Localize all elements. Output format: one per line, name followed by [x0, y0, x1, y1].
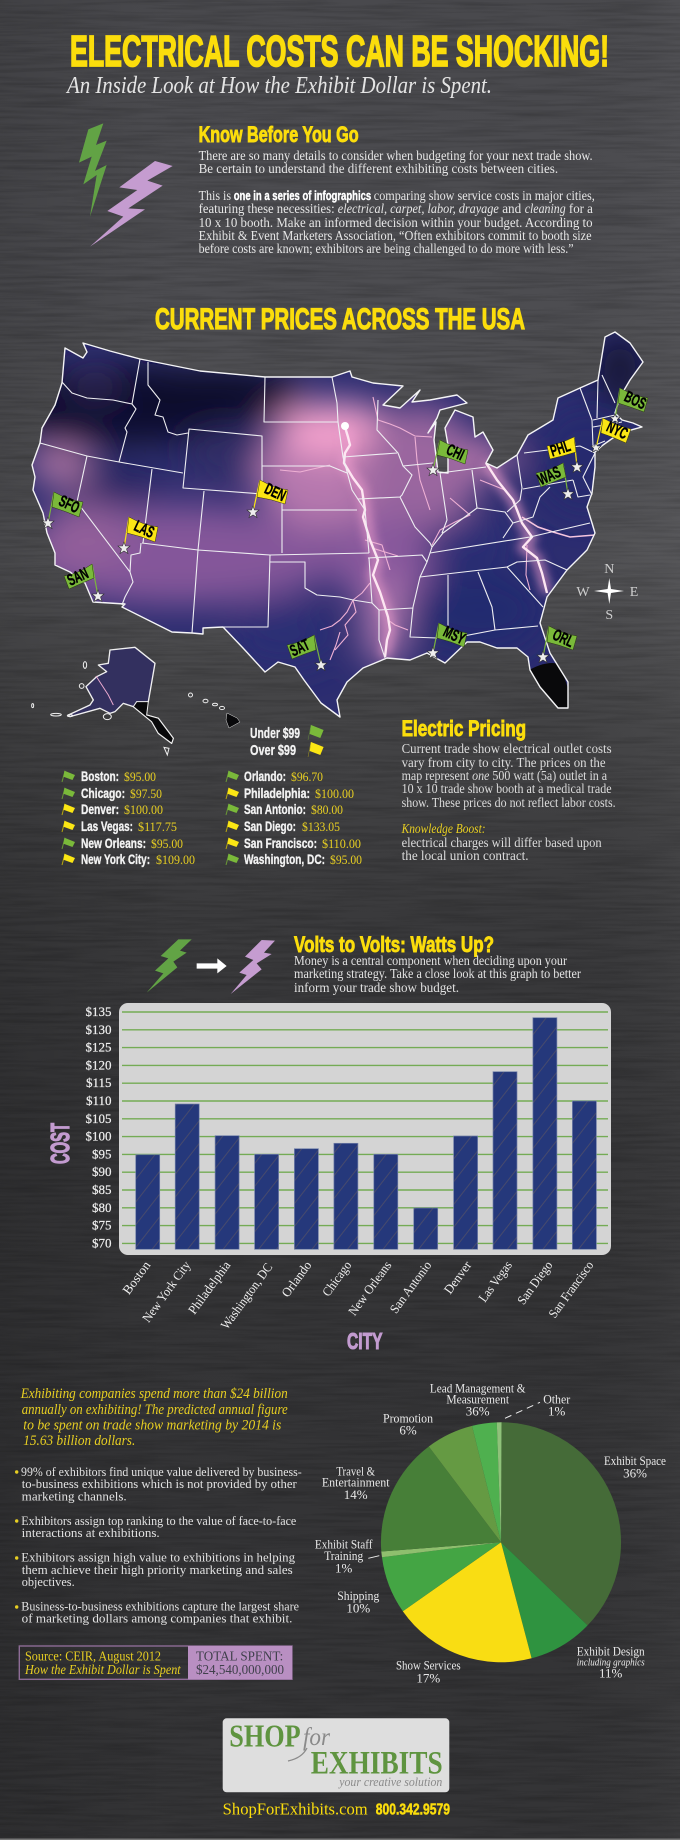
y axis labels: $135: [86, 1004, 112, 1019]
subtitle: An Inside Look at How the Exhibit Dollar is Spent.: [65, 73, 492, 99]
flag PHL: [547, 437, 583, 472]
y axis labels: $85: [92, 1182, 112, 1197]
axis title: cost: COST: [45, 1123, 75, 1164]
y axis labels: $90: [92, 1164, 112, 1179]
flag NYC: [591, 417, 631, 452]
x axis labels: Denver: [441, 1257, 475, 1297]
row San Diego: [226, 818, 340, 834]
pie labels: Exhibit Space: [604, 1453, 666, 1468]
x axis labels: Orlando: [278, 1258, 314, 1300]
y axis labels: $120: [86, 1057, 112, 1072]
source and total box: Source: CEIR, August 2012: [25, 1649, 161, 1664]
lightning glow: [344, 427, 547, 657]
panel: volts to volts: inform your trade show budget.: [294, 980, 459, 995]
map: hawaii: [188, 693, 240, 728]
legend: over 99: Over $99: [250, 742, 296, 759]
pie labels: 1%: [335, 1560, 353, 1575]
row Las Vegas: [62, 818, 177, 834]
row Orlando: Orlando:: [244, 768, 286, 784]
text block: intro: There are so many details to consider when budgeting for your next trade show.: [199, 148, 593, 163]
flags on the map: [42, 387, 649, 670]
pie labels: Exhibit Design: [577, 1644, 645, 1659]
text block: exhibiting spend callout: to be spent on trade show marketing by 2014 is: [23, 1418, 282, 1434]
bullet list: objectives.: [22, 1574, 75, 1589]
row Las Vegas: $117.75: [138, 819, 177, 834]
y axis labels: $125: [86, 1040, 112, 1055]
pie labels: Entertainment: [322, 1475, 390, 1490]
x axis labels: Washington, DC: [217, 1260, 275, 1332]
row San Francisco: $110.00: [322, 836, 361, 851]
florida black: [530, 663, 568, 708]
logo: EXHIBITS: [311, 1745, 443, 1781]
y axis labels: $70: [92, 1235, 112, 1250]
source and total box: $24,540,000,000: [196, 1662, 284, 1677]
row New York City: $109.00: [156, 852, 195, 867]
legend: [250, 725, 324, 759]
flag DEN: [247, 479, 289, 518]
panel: volts to volts: Money is a central component when deciding upon your: [294, 953, 567, 968]
flag DEN: DEN: [262, 479, 289, 505]
icon: compass: N: [604, 562, 614, 577]
bullet list: [15, 1464, 302, 1626]
pie labels: Promotion: [383, 1411, 433, 1426]
state lines: [40, 359, 622, 658]
text block: intro: Be certain to understand the different exhibiting costs between cities.: [199, 161, 558, 176]
bullet list: interactions at exhibitions.: [22, 1525, 160, 1540]
bullet list: them achieve their high priority marketing and sales: [22, 1562, 293, 1577]
text block: intro: for a: [569, 201, 593, 216]
row Philadelphia: Philadelphia:: [244, 785, 310, 801]
bullet list: 99% of exhibitors find unique value delivered by business-: [21, 1464, 302, 1479]
flag MSY: [427, 622, 468, 658]
flag SAN: SAN: [64, 564, 91, 589]
x axis labels: [119, 1257, 596, 1332]
x axis labels: New York City: [139, 1258, 194, 1325]
source and total box: TOTAL SPENT:: [196, 1649, 283, 1664]
flag SFO: [42, 492, 83, 528]
row Denver: $100.00: [124, 802, 163, 817]
x axis labels: New Orleans: [345, 1258, 394, 1318]
pie labels: including graphics: [577, 1658, 645, 1669]
x axis labels: San Francisco: [545, 1258, 596, 1321]
row Washington DC: Washington, DC:: [244, 851, 325, 867]
y axis labels: $80: [92, 1200, 112, 1215]
x axis labels: San Antonio: [386, 1258, 434, 1316]
flag SFO: SFO: [56, 492, 83, 517]
footer contact: ShopForExhibits.com: [223, 1800, 368, 1819]
x axis labels: San Diego: [514, 1258, 555, 1307]
main lightning: [344, 427, 547, 657]
source and total box: How the Exhibit Dollar is Spent: [24, 1662, 182, 1677]
row Boston: [62, 768, 156, 784]
flag NYC: NYC: [604, 417, 631, 443]
axis title: city: CITY: [347, 1328, 382, 1354]
row Chicago: [62, 785, 162, 801]
flag WAS: WAS: [535, 463, 563, 489]
panel: electric pricing: electrical charges will differ based upon: [402, 835, 602, 850]
pie labels: 14%: [344, 1487, 368, 1502]
row New Orleans: New Orleans:: [81, 835, 146, 851]
row San Diego: $133.05: [302, 819, 340, 834]
row Philadelphia: $100.00: [315, 786, 354, 801]
panel: volts to volts: [294, 932, 581, 995]
row Washington DC: $95.00: [330, 852, 362, 867]
text block: exhibiting spend callout: annually on exhibiting! The predicted annual figure: [22, 1402, 288, 1418]
row Orlando: $96.70: [291, 769, 323, 784]
icon: purple bolt: [231, 940, 275, 994]
panel: electric pricing: Knowledge Boost:: [401, 821, 486, 836]
panel: electric pricing: vary from city to city. The prices on the: [402, 755, 606, 770]
heading: electric pricing: Electric Pricing: [402, 716, 526, 741]
flag LAS: LAS: [131, 517, 157, 542]
row Denver: Denver:: [81, 801, 119, 817]
panel: electric pricing: 10 x 10 trade show booth at a medical trade: [402, 781, 612, 796]
row San Francisco: San Francisco:: [244, 835, 317, 851]
flag BOS: [610, 387, 649, 423]
flag SAT: [287, 635, 327, 670]
text block: exhibiting spend callout: 15.63 billion dollars.: [23, 1433, 135, 1449]
pie labels: Lead Management &: [430, 1380, 526, 1395]
icon: compass: S: [605, 608, 613, 623]
y axis labels: $95: [92, 1146, 112, 1161]
icon: compass: [576, 562, 638, 623]
logo: [223, 1718, 449, 1792]
text block: intro: cleaning: [525, 201, 566, 216]
us outline: [32, 332, 643, 717]
text block: intro: 10 x 10 booth. Make an informed decision within your budget. According to: [199, 215, 593, 230]
x axis labels: Philadelphia: [185, 1258, 234, 1317]
icon: compass: W: [576, 585, 590, 600]
row San Diego: San Diego:: [244, 818, 296, 834]
pie labels: Exhibit Staff: [315, 1536, 373, 1551]
y axis labels: $115: [86, 1075, 112, 1090]
pie labels: Measurement: [446, 1391, 509, 1406]
y axis labels: $130: [86, 1022, 112, 1037]
icon: green bolt: [147, 939, 192, 993]
row Chicago: $97.50: [130, 786, 162, 801]
text block: intro: featuring these necessities:: [199, 201, 335, 216]
pie labels: [315, 1380, 666, 1685]
flag BOS: BOS: [622, 387, 649, 413]
pie labels: Other: [543, 1391, 571, 1406]
row Boston: $95.00: [124, 769, 156, 784]
flag PHL: PHL: [548, 437, 573, 460]
y axis labels: $110: [86, 1093, 112, 1108]
flag WAS: [535, 463, 574, 500]
pie labels: 11%: [599, 1666, 623, 1681]
bullet list: Business-to-business exhibitions capture the largest share: [21, 1599, 299, 1614]
heading: volts to volts: Volts to Volts: Watts Up?: [294, 932, 494, 957]
flag ORL: ORL: [550, 625, 577, 651]
x axis labels: Las Vegas: [475, 1258, 515, 1305]
text block: intro: electrical, carpet, labor, drayage: [338, 201, 499, 216]
y axis labels: [86, 1004, 112, 1250]
y axis labels: $100: [86, 1129, 112, 1144]
text block: intro: [199, 148, 595, 256]
pie labels: 36%: [623, 1465, 647, 1480]
row San Antonio: $80.00: [311, 802, 343, 817]
footer contact: [223, 1800, 450, 1819]
pie labels: 17%: [416, 1670, 440, 1685]
pie labels: Travel &: [336, 1464, 375, 1479]
map: alaska: [32, 647, 173, 755]
price list: [62, 768, 362, 867]
row Orlando: [226, 768, 323, 784]
flag MSY: MSY: [441, 622, 468, 648]
pie chart: [315, 1380, 666, 1685]
icon: arrow: [197, 958, 227, 973]
row Chicago: Chicago:: [81, 785, 125, 801]
panel: electric pricing: map represent one 500 watt (5a) outlet in a: [402, 768, 607, 783]
lightning branches: [280, 397, 530, 660]
icon: lightning bolts top: [79, 123, 173, 247]
y axis labels: $105: [86, 1111, 112, 1126]
bullet list: to-business exhibitions which is not provided by other: [22, 1476, 297, 1491]
text block: intro: comparing show service costs in major cities,: [374, 188, 595, 203]
bullet list: Exhibitors assign high value to exhibitions in helping: [21, 1550, 295, 1565]
text block: intro: and: [502, 201, 521, 216]
footer contact: 800.342.9579: [376, 1802, 450, 1819]
flag LAS: [118, 517, 158, 554]
text block: intro: Exhibit & Event Marketers Association, “Often exhibitors commit to booth size: [199, 228, 592, 243]
text block: intro: one in a series of infographics: [234, 188, 371, 203]
row Denver: [62, 801, 163, 817]
panel: electric pricing: [401, 716, 616, 863]
row New Orleans: $95.00: [151, 836, 183, 851]
flag ORL: [537, 625, 577, 662]
bar chart: [45, 1003, 611, 1354]
flag SAT: SAT: [287, 635, 313, 660]
y axis labels: $75: [92, 1218, 112, 1233]
logo: SHOP: [229, 1718, 301, 1754]
bars: [136, 1018, 596, 1249]
map: contiguous USA with lightning: [31, 331, 644, 718]
panel: volts to volts: marketing strategy. Take a close look at this graph to better: [294, 966, 581, 981]
heading: know before you go: Know Before You Go: [199, 122, 359, 147]
row Boston: Boston:: [81, 768, 119, 784]
legend: under 99: Under $99: [250, 725, 300, 742]
panel: electric pricing: show. These prices do not reflect labor costs.: [402, 795, 616, 810]
x axis labels: Chicago: [319, 1258, 354, 1299]
icon: compass: E: [630, 585, 638, 600]
pie labels: 1%: [548, 1404, 566, 1419]
text block: exhibiting spend callout: [20, 1386, 288, 1449]
flag CHI: CHI: [444, 440, 467, 464]
bullet list: of marketing dollars among companies that exhibit.: [22, 1611, 292, 1626]
pie labels: Training: [324, 1548, 364, 1563]
flag CHI: [427, 440, 468, 476]
panel: know before you go: [199, 122, 595, 256]
row Las Vegas: Las Vegas:: [81, 818, 133, 834]
text block: intro: This is: [199, 188, 231, 203]
panel: electric pricing: the local union contract.: [402, 848, 529, 863]
flag SAN: [64, 564, 104, 602]
row San Antonio: San Antonio:: [244, 801, 306, 817]
row Philadelphia: [226, 785, 354, 801]
bullet list: Exhibitors assign top ranking to the value of face-to-face: [21, 1513, 297, 1528]
pie labels: 36%: [466, 1404, 490, 1419]
logo: your creative solution: [337, 1775, 442, 1789]
bullet list: marketing channels.: [22, 1489, 127, 1504]
pie labels: 10%: [346, 1600, 370, 1615]
logo: for: [303, 1724, 330, 1751]
panel: electric pricing: Current trade show electrical outlet costs: [402, 741, 612, 756]
x axis labels: Boston: [119, 1258, 154, 1297]
text block: exhibiting spend callout: Exhibiting companies spend more than $24 billion: [20, 1386, 288, 1402]
pie labels: 6%: [399, 1422, 417, 1437]
pie labels: Shipping: [337, 1588, 380, 1603]
pie labels: Show Services: [396, 1657, 461, 1672]
text block: intro: before costs are known; exhibitors are being challenged to do more with less.”: [199, 241, 574, 256]
row New York City: New York City:: [81, 851, 150, 867]
source and total box: [19, 1646, 292, 1679]
